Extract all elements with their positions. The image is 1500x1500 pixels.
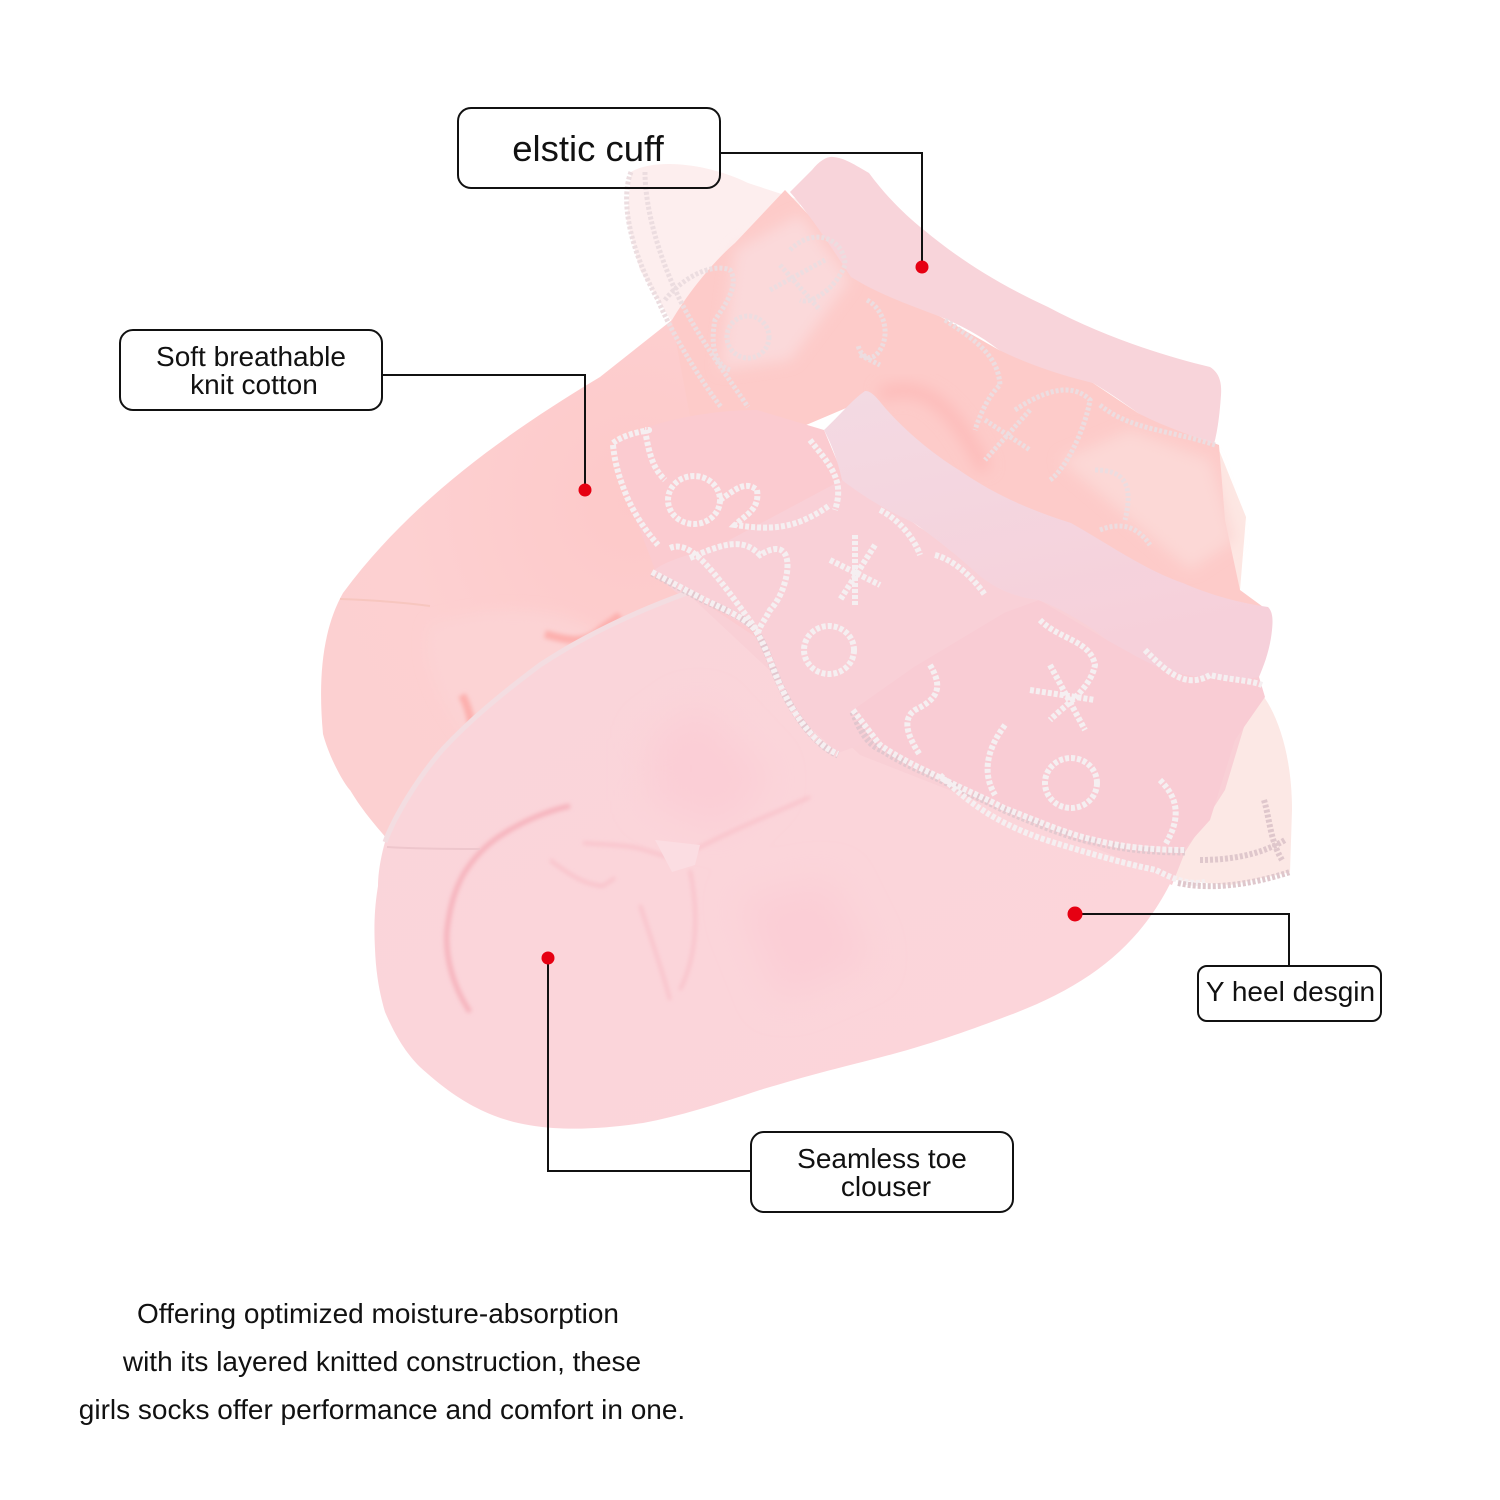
text block: description: girls socks offer performance and comfort in one.: [79, 1394, 685, 1425]
callout: soft breathable knit cotton: [119, 329, 383, 411]
text block: description: with its layered knitted construction, these: [123, 1346, 641, 1377]
back sock inner lace: [672, 190, 1270, 612]
back sock lace embroidery: [627, 172, 1215, 545]
callout: seamless toe closure: Seamless toe: [797, 1143, 967, 1174]
back sock foot: [321, 320, 800, 840]
callout: soft breathable knit cotton: Soft breathable: [156, 341, 346, 372]
back sock far lace right: [1140, 440, 1246, 600]
front sock: [374, 391, 1292, 1129]
leader: knit cotton: [382, 375, 592, 496]
leader: elastic cuff: [720, 153, 928, 274]
callout: soft breathable knit cotton: knit cotton: [190, 369, 318, 400]
front sock far lace trim: [1178, 800, 1290, 886]
front sock knit motif: [650, 705, 870, 1000]
text block: description: Offering optimized moisture-absorption: [137, 1298, 619, 1329]
back sock toe seam: [340, 599, 430, 606]
front sock toe seam: [387, 847, 480, 849]
back sock cuff: [790, 157, 1221, 444]
front sock rear lace lobe: [613, 410, 880, 640]
front sock toe crease: [447, 806, 570, 1012]
callout: seamless toe closure: clouser: [841, 1171, 931, 1202]
front sock upper rim: [385, 593, 687, 842]
front sock lace underlay: [652, 480, 1259, 885]
text block: description: [79, 1298, 685, 1425]
callout: seamless toe closure: [750, 1131, 1014, 1213]
back sock: [321, 157, 1270, 840]
callout: Y heel design: [1197, 965, 1382, 1022]
front sock lace embroidery: [652, 573, 1185, 852]
front sock centre seam and knot: [550, 797, 810, 1000]
front sock front lace lobe: [853, 600, 1265, 850]
leader: toe closure: [542, 952, 751, 1171]
leader: Y heel: [1068, 906, 1289, 966]
callout: elastic cuff: elstic cuff: [512, 128, 664, 169]
callout: Y heel design: Y heel desgin: [1206, 976, 1375, 1007]
back sock heel fold: [427, 611, 600, 740]
front sock foot: [374, 593, 1172, 1129]
front sock middle lace lobe: [652, 480, 1039, 753]
front sock far lace: [1175, 690, 1292, 885]
callout: elastic cuff: [457, 107, 721, 189]
front sock cuff: [824, 391, 1273, 679]
back sock far lace left: [627, 164, 800, 322]
